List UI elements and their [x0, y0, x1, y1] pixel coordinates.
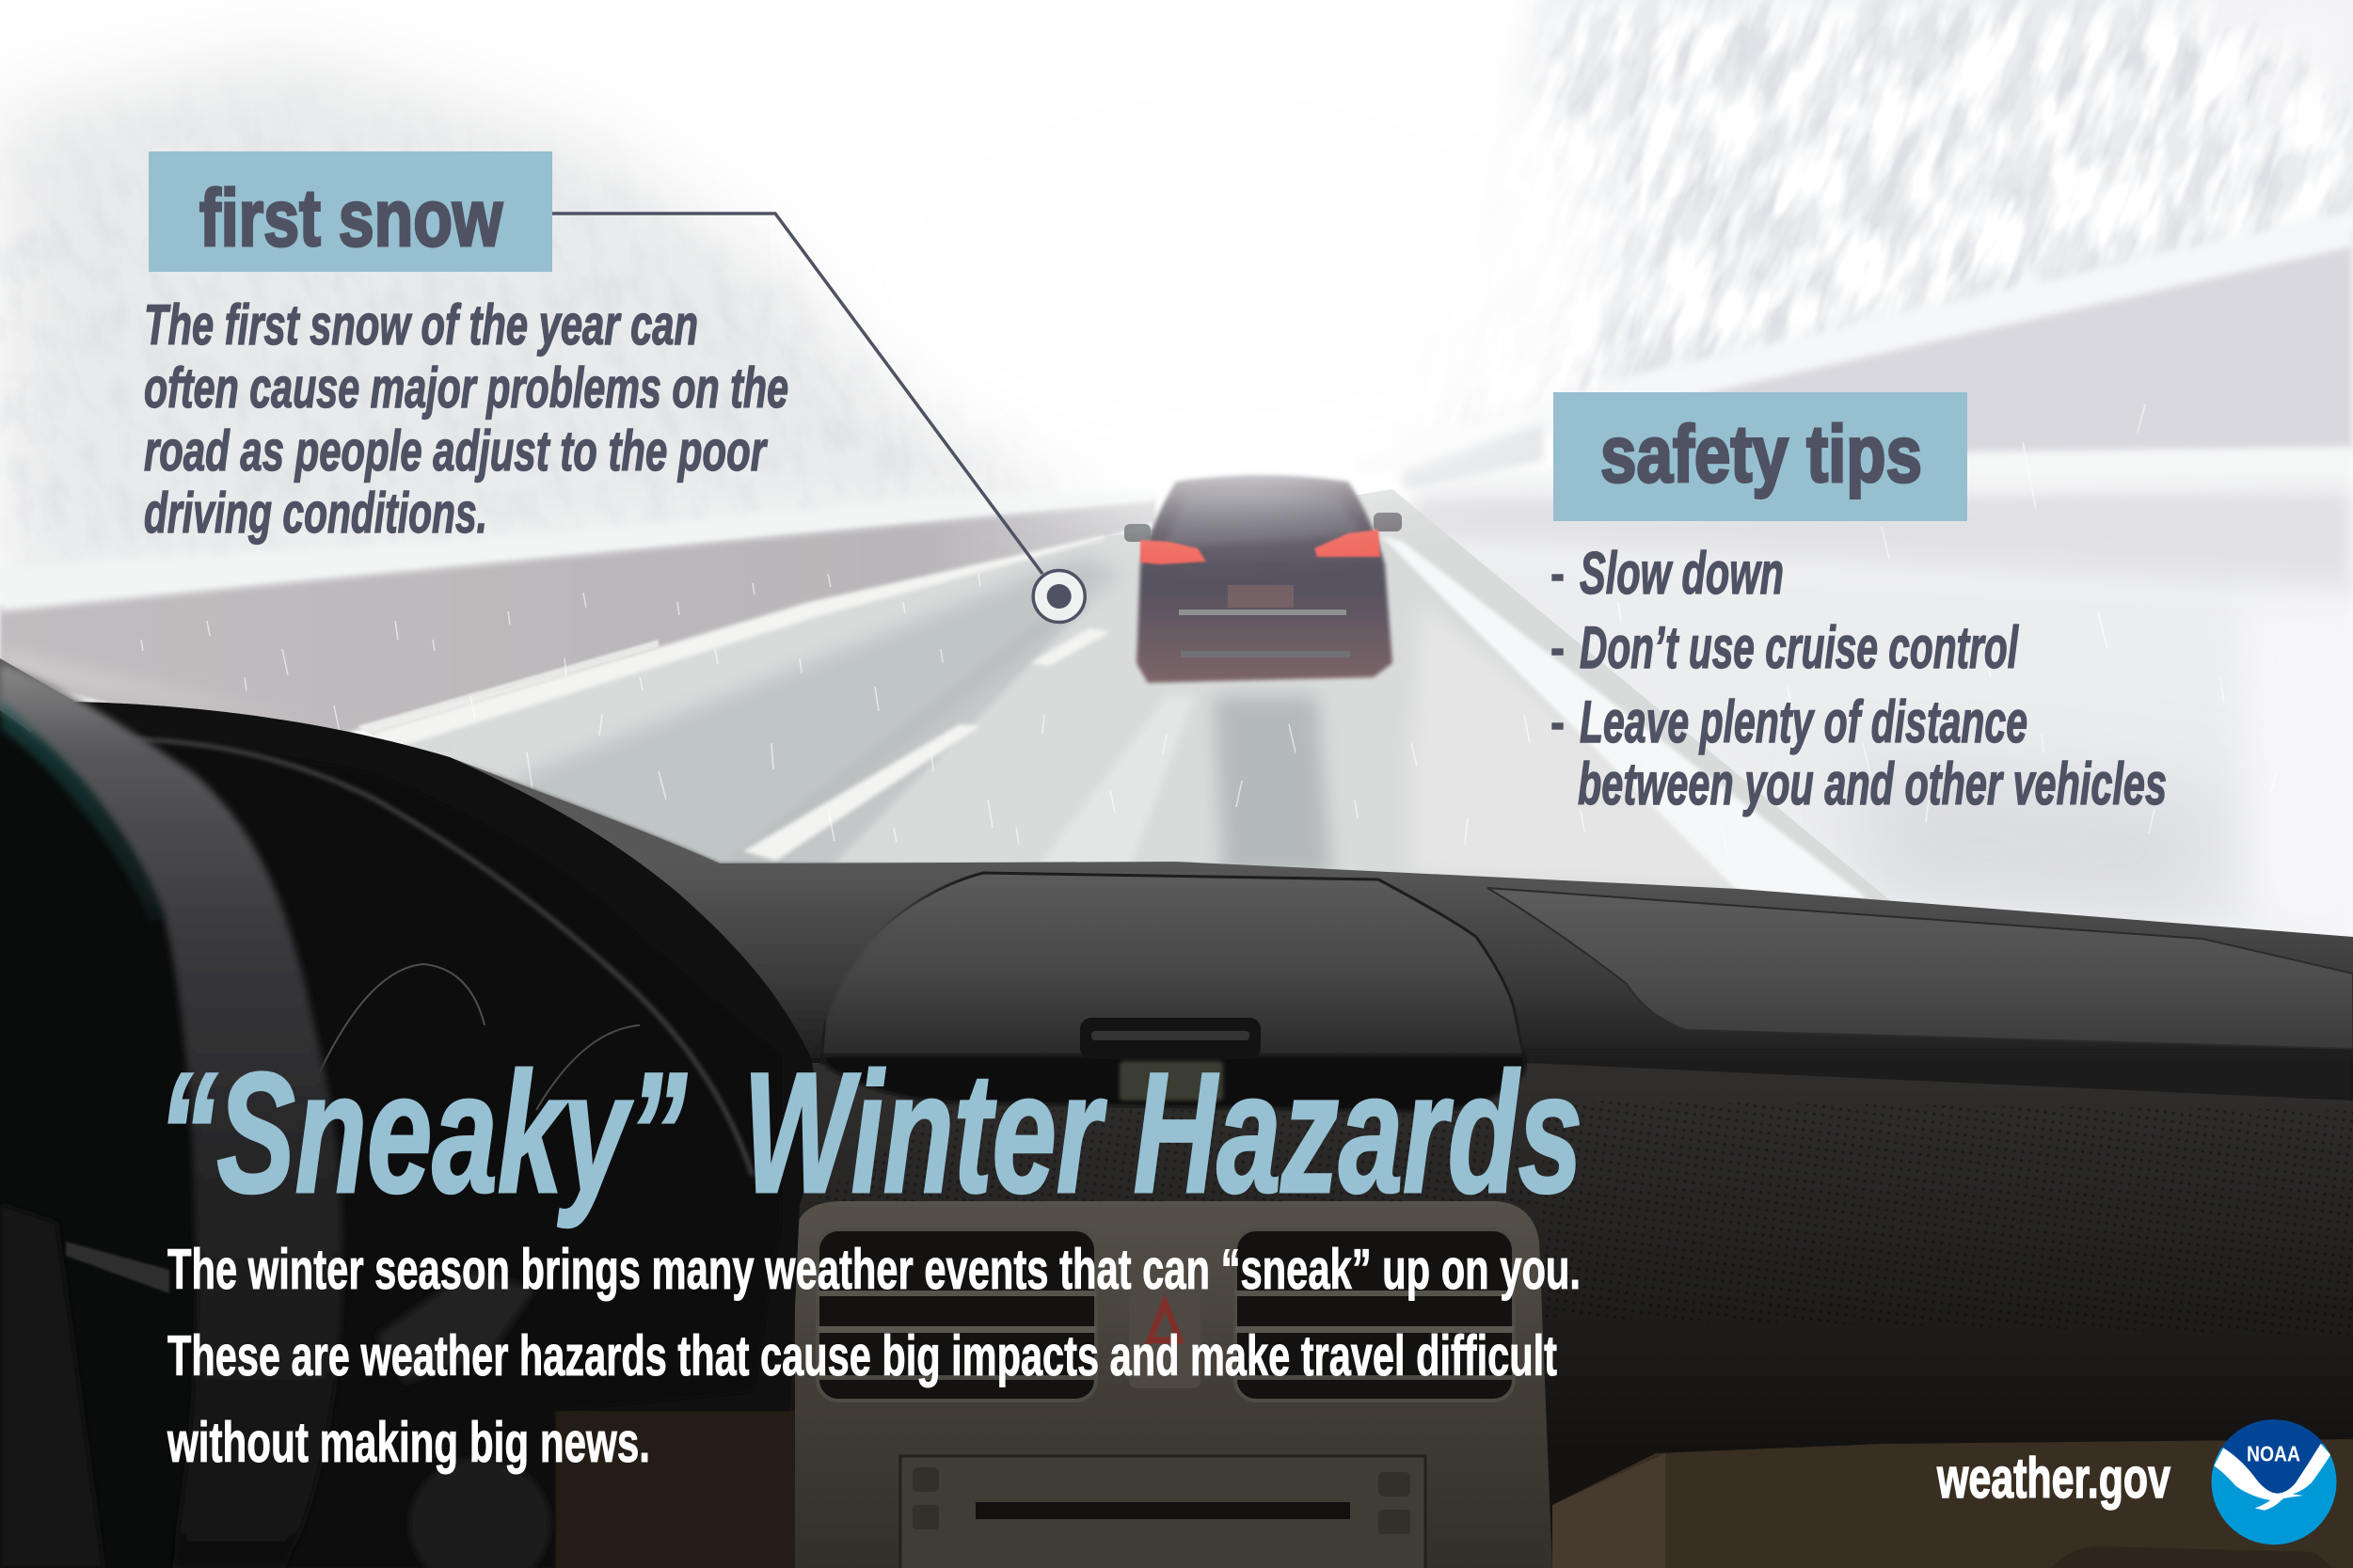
- callout: safety tips heading: safety tips: [1600, 410, 1922, 499]
- title: Winter Hazards: [743, 1037, 1582, 1228]
- text block: safety tips list: Slow down: [1580, 541, 1784, 607]
- tan lower trim: [1552, 1439, 2353, 1568]
- rim: [0, 664, 342, 1568]
- fence far right: [1402, 423, 1543, 489]
- stalk and ignition: [376, 1270, 536, 1383]
- side mirrors: [1124, 524, 1151, 542]
- steering wheel: [0, 664, 342, 1568]
- text block: introduction: without making big news.: [167, 1411, 650, 1474]
- icon: NOAA logo: [2211, 1419, 2337, 1544]
- text block: introduction: [167, 1238, 1581, 1474]
- tail lights: [1140, 540, 1206, 564]
- hazard button: [1129, 1260, 1200, 1388]
- title: “Sneaky”: [158, 1037, 687, 1228]
- radio unit: [900, 1456, 1425, 1568]
- text block: first snow description: The first snow of the year can: [144, 293, 698, 356]
- gauge arcs: [315, 964, 485, 1082]
- logo white bird: [2214, 1444, 2330, 1511]
- text block: first snow description: [144, 293, 788, 545]
- rear glass: [1163, 491, 1360, 547]
- left tan panel: [555, 1411, 800, 1568]
- website link: weather.gov: [1936, 1447, 2170, 1510]
- right raised dash section: [1487, 888, 2353, 1049]
- teal reflection on rim: [0, 701, 165, 922]
- road surface: [360, 489, 1891, 901]
- top centre dash pad: [821, 873, 1525, 1063]
- callout: first snow heading: [149, 151, 552, 272]
- text block: first snow description: driving conditions.: [144, 482, 487, 545]
- car body: [1137, 475, 1392, 683]
- snowy trees right: [1392, 0, 2353, 461]
- text block: safety tips list: Don’t use cruise control: [1580, 615, 2019, 681]
- spoke: [66, 1242, 169, 1293]
- glove box handle: [1080, 1018, 1261, 1059]
- callout: safety tips heading: [1553, 392, 1967, 521]
- rounded glove tray at bottom right: [2051, 1546, 2333, 1568]
- guard rail wall left: [0, 489, 1155, 752]
- tree texture: [6, 0, 2348, 502]
- logo wordmark: NOAA: [2247, 1441, 2300, 1465]
- recess below pad: [821, 1055, 1525, 1112]
- dashboard base: [0, 658, 2353, 1568]
- text block: introduction: These are weather hazards that cause big impacts and make travel difficult: [167, 1324, 1557, 1387]
- text block: safety tips list: [1552, 541, 2167, 817]
- right barrier wall and snowbank: [1350, 212, 2353, 950]
- column: [0, 1204, 103, 1568]
- snowy trees left: [0, 56, 1110, 602]
- lighter tan beside console: [1552, 1453, 1665, 1568]
- text block: introduction: The winter season brings many weather events that can “sneak” up on you.: [167, 1238, 1581, 1301]
- tip dashes: [1552, 575, 1563, 729]
- logo dark sky: [2222, 1419, 2323, 1494]
- callout: first snow heading: first snow: [199, 174, 503, 263]
- display readout: [1120, 1061, 1223, 1101]
- text block: first snow description: road as people adjust to the poor: [144, 420, 769, 483]
- haze over horizon: [828, 9, 1618, 499]
- car ahead: [1124, 475, 1402, 683]
- upper left grey strip of hood: [450, 757, 988, 1055]
- text block: safety tips list: Leave plenty of distance: [1580, 689, 2027, 755]
- falling snow specks: [141, 404, 2277, 856]
- instrument cluster shroud: [0, 702, 817, 1568]
- right air vent: [1235, 1229, 1514, 1401]
- pointer line from first snow to the road: [552, 214, 1085, 623]
- title: [158, 1037, 1582, 1228]
- lower dash fill: [0, 1058, 2353, 1568]
- lane markings: [358, 536, 1868, 898]
- centre console: [795, 1201, 1552, 1568]
- pointer marker: [1033, 570, 1085, 623]
- dotted lower dash panel: [696, 1063, 2353, 1568]
- dark band below dash: [1525, 1053, 2353, 1101]
- left air vent: [818, 1229, 1096, 1401]
- text block: first snow description: often cause major problems on the: [144, 356, 788, 420]
- bumper lines: [1179, 610, 1346, 615]
